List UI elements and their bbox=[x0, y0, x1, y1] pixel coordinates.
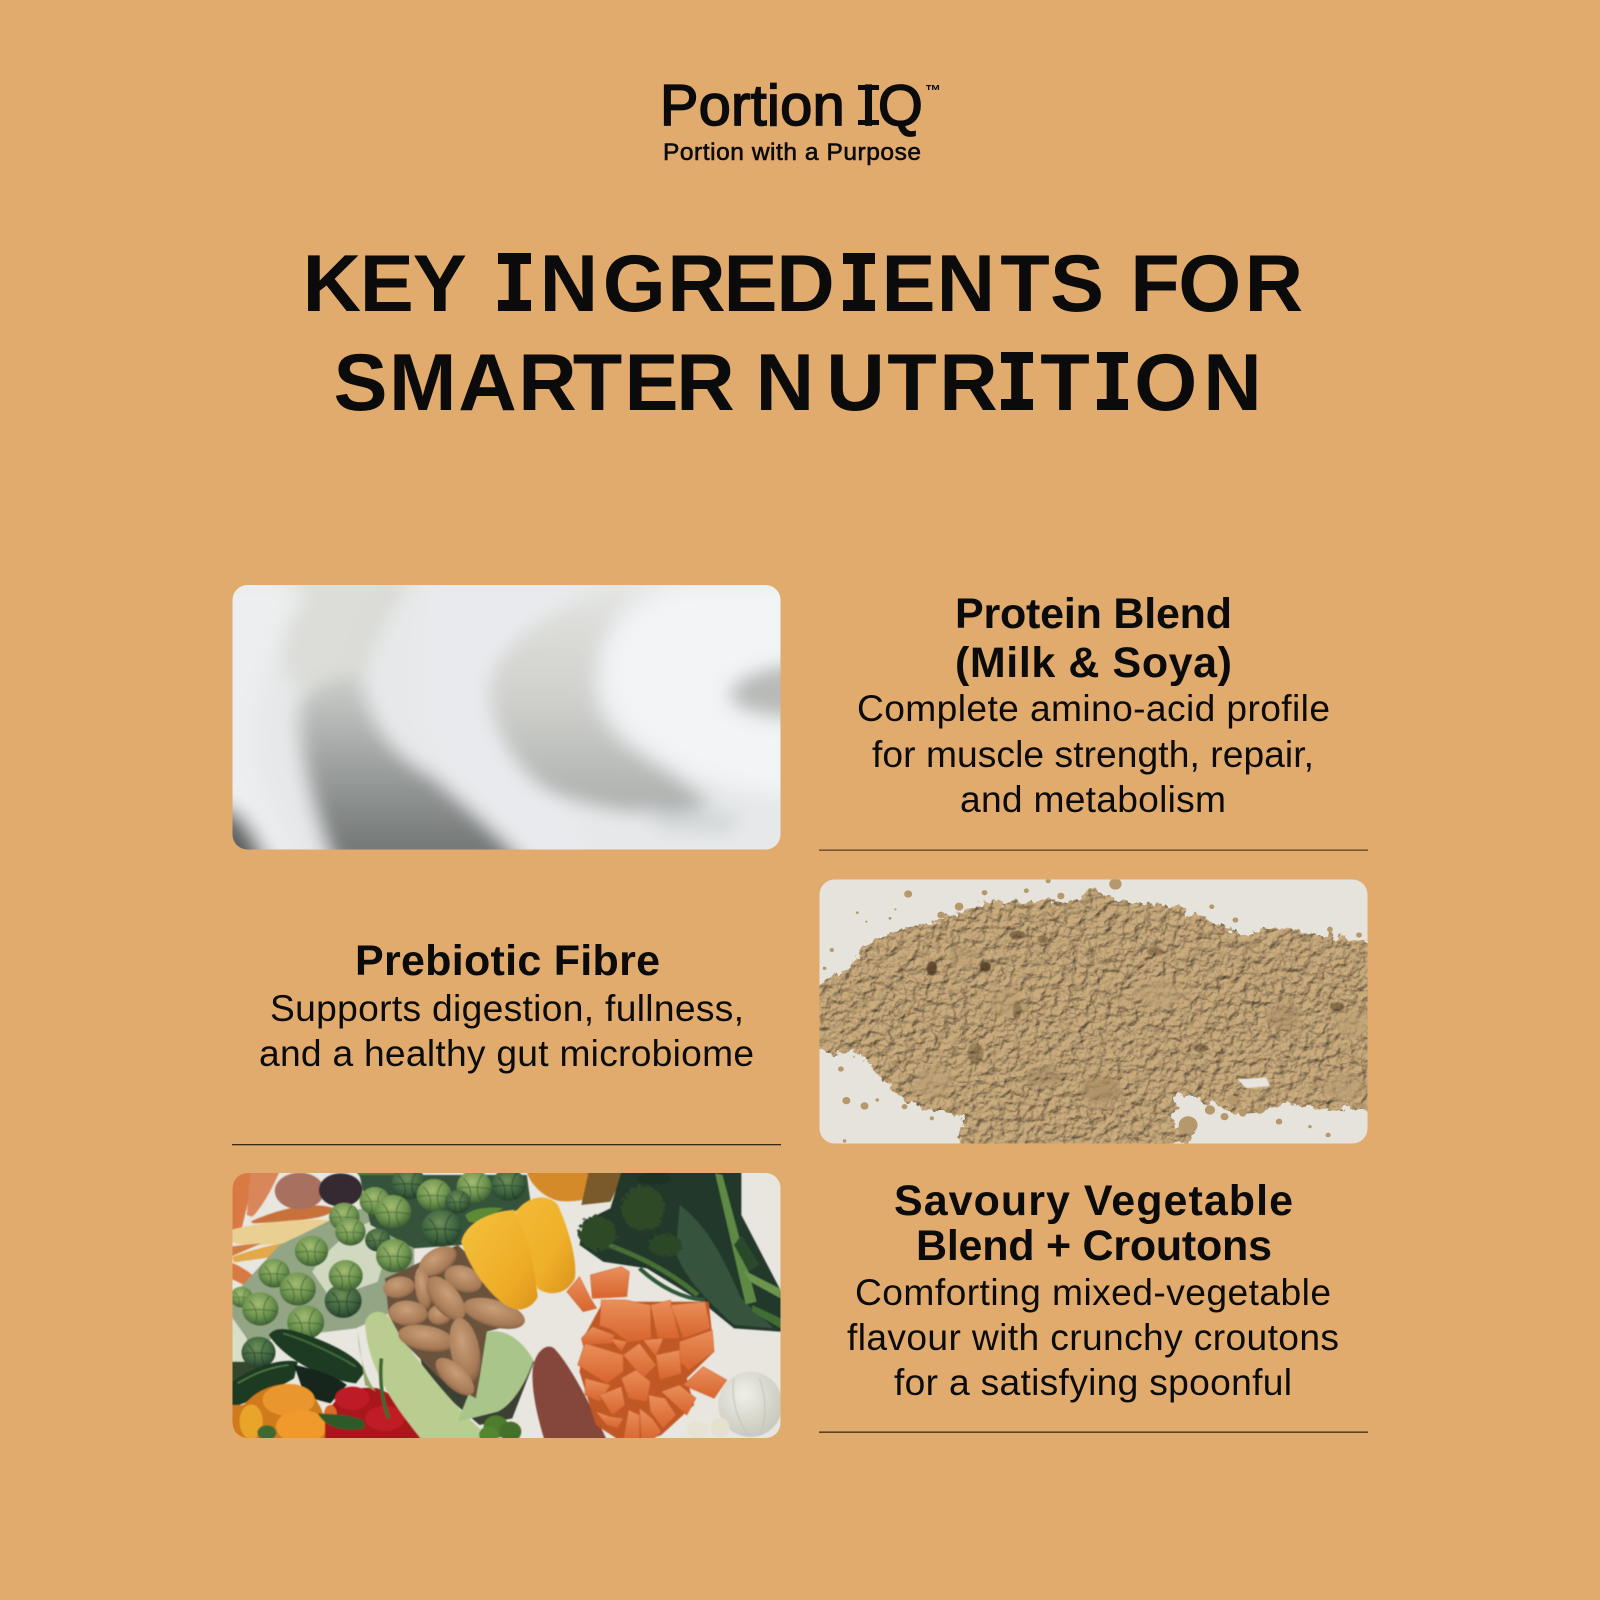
description: savoury vegetable blend bbox=[847, 1271, 1339, 1403]
text block: prebiotic fibre bbox=[259, 937, 754, 1074]
tonal lumps bbox=[915, 947, 1368, 1103]
text block: savoury vegetable blend bbox=[847, 1177, 1339, 1403]
description: protein blend: for muscle strength, repair, bbox=[872, 733, 1314, 775]
logo wordmark: Portion bbox=[660, 74, 845, 138]
carrots and potatoes top left bbox=[230, 1172, 400, 1291]
description: savoury vegetable blend: for a satisfying spoonful bbox=[894, 1361, 1292, 1403]
sweet potato bbox=[532, 1347, 608, 1442]
heading: savoury vegetable blend: Savoury Vegetable bbox=[894, 1177, 1293, 1225]
brussels sprouts bbox=[230, 1167, 526, 1368]
heading: protein blend: (Milk & Soya) bbox=[955, 639, 1232, 687]
green cauliflower stalk and leaves bbox=[358, 1312, 534, 1444]
description: protein blend bbox=[857, 687, 1330, 820]
photo: fibre powder bbox=[820, 880, 1368, 1144]
logo wordmark: I bbox=[860, 74, 877, 138]
photo: mixed vegetables bbox=[225, 1165, 795, 1445]
logo wordmark: Q bbox=[878, 74, 923, 138]
heading: savoury vegetable blend bbox=[894, 1177, 1293, 1270]
logo: PortionIQ with tagline bbox=[660, 74, 941, 166]
description: savoury vegetable blend: Comforting mixed-vegetable bbox=[855, 1271, 1331, 1313]
description: prebiotic fibre bbox=[259, 987, 754, 1074]
heading: protein blend: Protein Blend bbox=[955, 590, 1232, 638]
sweet potato cubes bbox=[567, 1267, 727, 1442]
tagline: Portion with a Purpose bbox=[663, 139, 921, 166]
pits and shadows bbox=[927, 931, 1344, 1064]
bright gaps in the pile bbox=[1237, 1077, 1270, 1088]
title bbox=[303, 239, 1303, 428]
greens and broccoli bbox=[579, 1172, 781, 1332]
description: prebiotic fibre: Supports digestion, fullness, bbox=[270, 987, 744, 1029]
garlic bbox=[687, 1372, 782, 1439]
powder pile bbox=[814, 888, 1381, 1150]
red bell pepper bbox=[318, 1387, 427, 1442]
yellow bell pepper bbox=[461, 1197, 575, 1310]
text block: protein blend bbox=[857, 590, 1330, 820]
title: SMARTER NUTRITION bbox=[334, 338, 1262, 428]
orange bell pepper bbox=[230, 1384, 327, 1443]
description: protein blend: Complete amino-acid profile bbox=[857, 687, 1330, 729]
scattered specks bbox=[823, 878, 1362, 1143]
heading: savoury vegetable blend: Blend + Croutons bbox=[916, 1222, 1272, 1270]
description: prebiotic fibre: and a healthy gut microbiome bbox=[259, 1032, 754, 1074]
heading: protein blend bbox=[955, 590, 1232, 687]
title: KEY INGREDIENTS FOR bbox=[303, 239, 1303, 329]
description: savoury vegetable blend: flavour with crunchy croutons bbox=[847, 1316, 1339, 1358]
squash at top bbox=[527, 1172, 621, 1201]
pale sprout stems and shadow base bbox=[230, 1175, 530, 1385]
trademark: ™ bbox=[925, 83, 941, 100]
heading: prebiotic fibre: Prebiotic Fibre bbox=[355, 937, 660, 985]
fingerling potatoes bbox=[381, 1240, 529, 1401]
cucumbers bbox=[230, 1329, 365, 1408]
description: protein blend: and metabolism bbox=[960, 778, 1226, 820]
photo: milk swirl bbox=[232, 585, 780, 850]
